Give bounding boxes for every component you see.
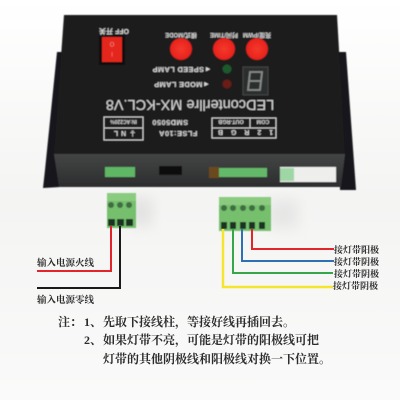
left mounting flange — [43, 52, 62, 188]
neutral wire: black — [37, 226, 120, 288]
speed lamp label: ◄SPEED LAMP — [152, 65, 212, 74]
note line 2: 如果灯带不亮，可能是灯带的阳极线可把 — [103, 332, 319, 347]
white rating sticker — [280, 167, 336, 182]
amber connector — [209, 167, 219, 178]
button: mode — [165, 31, 197, 60]
power switch: O — [109, 40, 114, 46]
SMD5050 label: SMD5050 — [152, 118, 188, 127]
mode LED — [222, 80, 232, 88]
power switch: I — [111, 50, 113, 56]
output terminal table: COM — [256, 118, 269, 124]
model title: LEDconterllre MX-KCL.V8 — [106, 96, 274, 112]
power socket on device — [105, 167, 135, 177]
label: LED cathode 3: 接灯带阴极 — [333, 280, 378, 291]
switch label: OFF 开关 — [99, 27, 129, 36]
label: live wire: 输入电源火线 — [37, 257, 95, 269]
right plug shadow — [268, 200, 298, 228]
note line 1: 注： — [58, 314, 82, 329]
output terminal table — [212, 118, 276, 138]
cathode wire: green — [233, 229, 333, 273]
button: time — [210, 31, 238, 60]
label: neutral wire: 输入电源零线 — [37, 294, 95, 306]
speed LED — [222, 64, 232, 74]
power terminal table: IN:AC220% — [110, 118, 137, 124]
label: LED cathode 1: 接灯带阴极 — [334, 256, 379, 267]
five-pin LED terminal plug — [219, 197, 271, 231]
button: brightness: 亮度/PWM — [243, 31, 271, 39]
right mounting flange — [338, 52, 356, 190]
notes text block — [58, 314, 331, 366]
output terminal table: 1 2 R G B — [215, 128, 273, 135]
power terminal table: ⏚NL — [111, 129, 136, 137]
button: time: 时间/TIME — [210, 31, 238, 39]
live wire: red — [37, 226, 111, 271]
note line 1: 1、 — [84, 315, 102, 329]
label: LED cathode 2: 接灯带阴极 — [334, 268, 379, 279]
fuse label: FLSE:10A — [159, 129, 197, 138]
note line 1: 先取下接线柱，等接好线再插回去。 — [103, 314, 295, 329]
rectangular port — [159, 166, 182, 175]
device top face — [54, 15, 345, 154]
button: mode: 模式/MODE — [165, 31, 197, 39]
button: brightness — [243, 31, 271, 60]
controller device — [43, 15, 356, 190]
output socket on device — [219, 168, 267, 177]
note line 3: 灯带的其他阴极线和阳极线对换一下位置。 — [102, 351, 331, 366]
seven segment digit display — [243, 67, 268, 95]
cathode wire: blue — [242, 229, 334, 261]
mode lamp label: ◄MODE LAMP — [154, 80, 210, 89]
output terminal table: OUT-RGB — [218, 118, 244, 124]
anode wire: red — [252, 229, 334, 249]
power terminal table — [104, 117, 143, 140]
power switch — [99, 35, 125, 65]
cathode wire: yellow — [223, 229, 333, 287]
label: LED anode: 接灯带阳极 — [334, 244, 379, 255]
left plug shadow — [130, 198, 152, 226]
three-pin power terminal plug — [107, 193, 136, 228]
note line 2: 2、 — [84, 333, 102, 347]
device front face — [54, 154, 345, 187]
